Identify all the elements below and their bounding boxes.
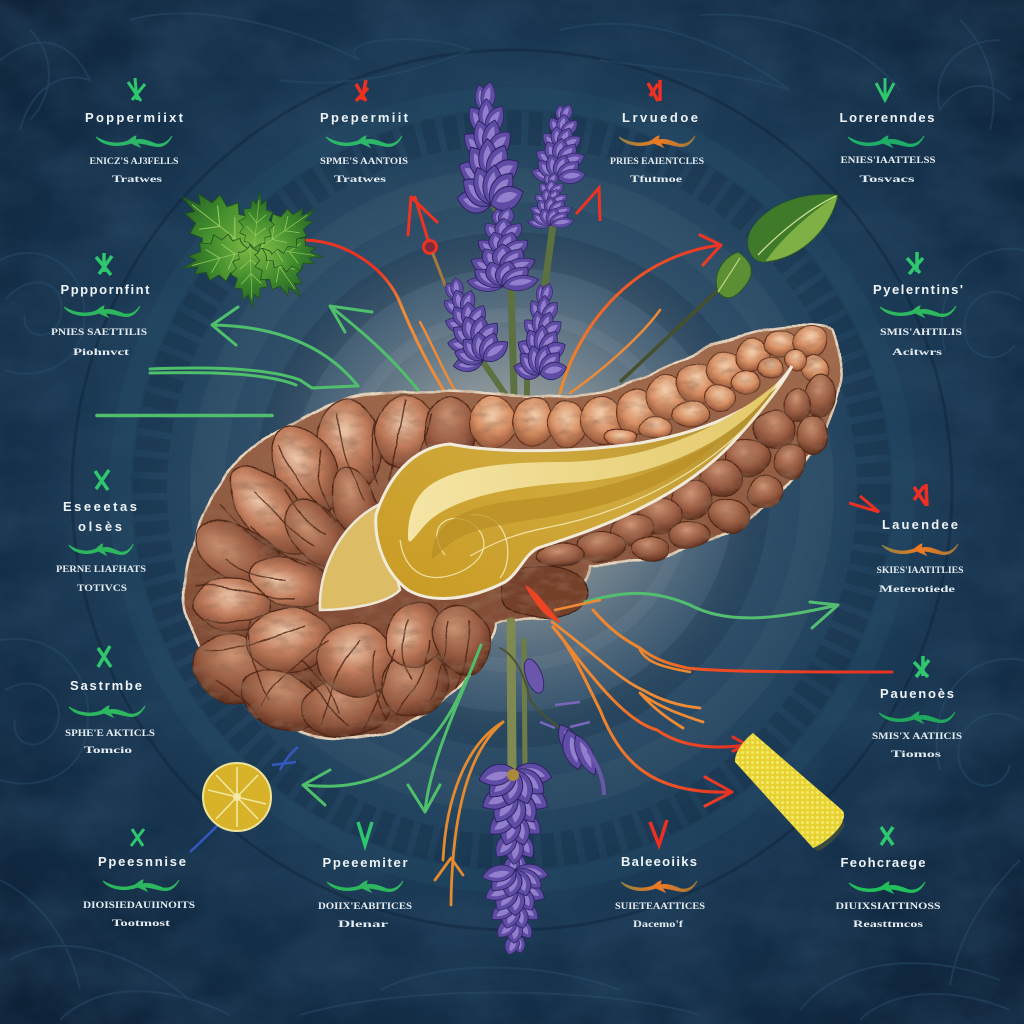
- description: [318, 902, 412, 930]
- description: Tosvacs: [860, 175, 915, 185]
- arrow: orange to leaf: [560, 235, 721, 393]
- label: left 2: [56, 470, 146, 594]
- title: Poppermiixt: [85, 110, 184, 125]
- divider: [879, 712, 955, 723]
- lavender: side buds: [520, 656, 604, 795]
- icon: green mark: [96, 253, 112, 275]
- title: Ppepermiit: [320, 110, 409, 125]
- description: [65, 729, 155, 756]
- description: Dlenar: [338, 920, 389, 930]
- description: SPME'S AANTOIS: [320, 157, 408, 167]
- lavender stem bottom: [500, 622, 565, 768]
- icon: mint sprig: [163, 173, 327, 310]
- description: [320, 157, 408, 185]
- small lower lobe: [501, 566, 589, 618]
- label: top row 1: [85, 78, 184, 185]
- icon: green mark: [907, 252, 923, 274]
- title: Lauendee: [882, 517, 958, 532]
- description: SUIETEAATTICES: [615, 902, 705, 912]
- divider: [621, 881, 697, 892]
- divider: [882, 544, 958, 555]
- title: [63, 499, 137, 534]
- description: Tfutmoe: [630, 175, 682, 185]
- title: Eseeetas: [63, 499, 137, 514]
- description: ENIES'IAATTELSS: [840, 156, 936, 166]
- label: bottom 2: [318, 822, 412, 930]
- icon: yellow tube: [735, 733, 845, 851]
- description: [876, 566, 964, 595]
- icon: green mark: [95, 470, 109, 490]
- arrow: red near lavender label: [849, 496, 879, 512]
- description: Tratwes: [334, 175, 386, 185]
- arrow: red up with ring: [408, 197, 456, 392]
- description: SPHE'E AKTICLS: [65, 729, 155, 739]
- label: right 3: [872, 656, 962, 760]
- title: Baleeoiiks: [621, 854, 697, 869]
- lavender: top flowers: [421, 79, 594, 384]
- label: right 1: [873, 252, 963, 358]
- description: [836, 902, 940, 930]
- arrow: red tick near lavender: [576, 188, 600, 221]
- description: PRIES EAIENTCLES: [610, 157, 704, 167]
- description: Dacemo'f: [633, 920, 684, 930]
- label: left 1: [51, 253, 150, 358]
- description: [880, 328, 962, 358]
- divider: [849, 882, 925, 893]
- title: Feohcraege: [840, 855, 926, 870]
- title: Pauenoès: [880, 686, 954, 701]
- lower tail lobes: [536, 373, 835, 566]
- icon: red mark: [650, 820, 667, 845]
- arrow: green down: [408, 645, 481, 812]
- arrow: mint to pancreas: [302, 240, 447, 396]
- description: Tiomos: [891, 750, 941, 760]
- gold duct main: [376, 366, 792, 598]
- fold creases: [195, 400, 470, 730]
- arrow: green long diagonal: [330, 306, 418, 390]
- title: olsès: [78, 519, 122, 534]
- description: PERNE LIAFHATS: [56, 565, 146, 575]
- icon: green mark: [914, 656, 929, 677]
- icon: green mark: [876, 78, 894, 100]
- description: Meterotiede: [879, 585, 955, 595]
- lavender: bottom flower: [476, 760, 554, 956]
- divider: [880, 306, 956, 317]
- gold dark swirl: [432, 440, 720, 560]
- icon: red mark: [648, 80, 660, 101]
- title: Ppppornfint: [60, 282, 150, 297]
- divider: [69, 706, 145, 717]
- upper cobbled lobes: [469, 327, 829, 448]
- title: Pyelerntins': [873, 282, 963, 297]
- divider: [64, 306, 140, 317]
- description: [840, 156, 936, 185]
- icon: green mark: [881, 827, 893, 845]
- description: SMIS'X AATIICIS: [872, 732, 962, 742]
- label: right 2: [876, 484, 964, 595]
- description: DIUIXSIATTINOSS: [836, 902, 940, 912]
- arrow: green hooked centre left: [150, 368, 356, 388]
- icon: red mark: [914, 484, 927, 506]
- arrow: green to lemon: [303, 680, 466, 805]
- label: left 3: [65, 646, 155, 756]
- description: Tootmost: [112, 919, 171, 929]
- description: DIOISIEDAUIINOITS: [83, 901, 195, 911]
- lavender stems top: [483, 205, 553, 396]
- description: [51, 328, 147, 358]
- title: Lorerenndes: [840, 110, 934, 125]
- arrows: orange bottom: [435, 722, 503, 905]
- icon: red mark: [356, 80, 368, 101]
- description: SMIS'AHTILIS: [880, 328, 962, 338]
- icon: lemon: [190, 747, 298, 852]
- icon: green mark: [98, 646, 111, 667]
- description: Reasttmcos: [853, 920, 923, 930]
- description: Piohnvct: [73, 348, 130, 358]
- description: [90, 157, 178, 185]
- description: [610, 157, 704, 185]
- leaf stem: [620, 290, 718, 382]
- arrow: green right: [585, 593, 838, 628]
- green arrows left: [97, 306, 418, 416]
- divider: [619, 136, 695, 147]
- red spark: [526, 586, 560, 622]
- divider: [96, 136, 172, 147]
- title: Ppeesnnise: [98, 854, 186, 869]
- divider: [103, 880, 179, 891]
- description: [83, 901, 195, 929]
- arrow: green bottom left straight: [97, 414, 272, 417]
- label: top row 4: [840, 78, 936, 185]
- arrow: green to upper left: [212, 307, 358, 386]
- description: PNIES SAETTILIS: [51, 328, 147, 338]
- label: top row 2: [320, 80, 409, 185]
- gold duct left piece: [320, 505, 400, 610]
- arrows: green lower: [303, 645, 481, 812]
- description: SKIES'IAATITLIES: [876, 566, 964, 576]
- icon: green mark: [131, 829, 144, 846]
- description: ENICZ'S AJ3FELLS: [90, 157, 178, 167]
- description: [872, 732, 962, 760]
- description: Acitwrs: [892, 348, 942, 358]
- icon: green mark: [128, 78, 145, 101]
- title: Ppeeemiter: [322, 855, 408, 870]
- title: Lrvuedoe: [622, 110, 698, 125]
- icon: green mark: [358, 822, 372, 845]
- description: [615, 902, 705, 930]
- label: bottom 3: [615, 820, 705, 930]
- description: Tratwes: [112, 175, 162, 185]
- upper left folds: [183, 395, 498, 743]
- divider: [848, 136, 924, 147]
- label: top row 3: [610, 80, 704, 185]
- description: [56, 565, 146, 594]
- pancreas body outline: [184, 326, 841, 738]
- title: Sastrmbe: [70, 678, 142, 693]
- label: bottom 1: [83, 829, 195, 929]
- divider: [326, 136, 402, 147]
- description: Tomcio: [84, 746, 132, 756]
- divider: [327, 881, 403, 892]
- icon: green leaf: [716, 195, 838, 298]
- divider: [69, 544, 133, 555]
- description: TOTIVCS: [77, 584, 127, 594]
- description: DOIIX'EABITICES: [318, 902, 412, 912]
- pancreas textured lobes: [183, 326, 841, 743]
- arrows: orange and red fan: [552, 600, 892, 806]
- gold inner swirl: [400, 385, 780, 578]
- label: bottom 4: [836, 827, 940, 930]
- gold highlight band: [408, 382, 778, 542]
- pancreas: [183, 326, 841, 743]
